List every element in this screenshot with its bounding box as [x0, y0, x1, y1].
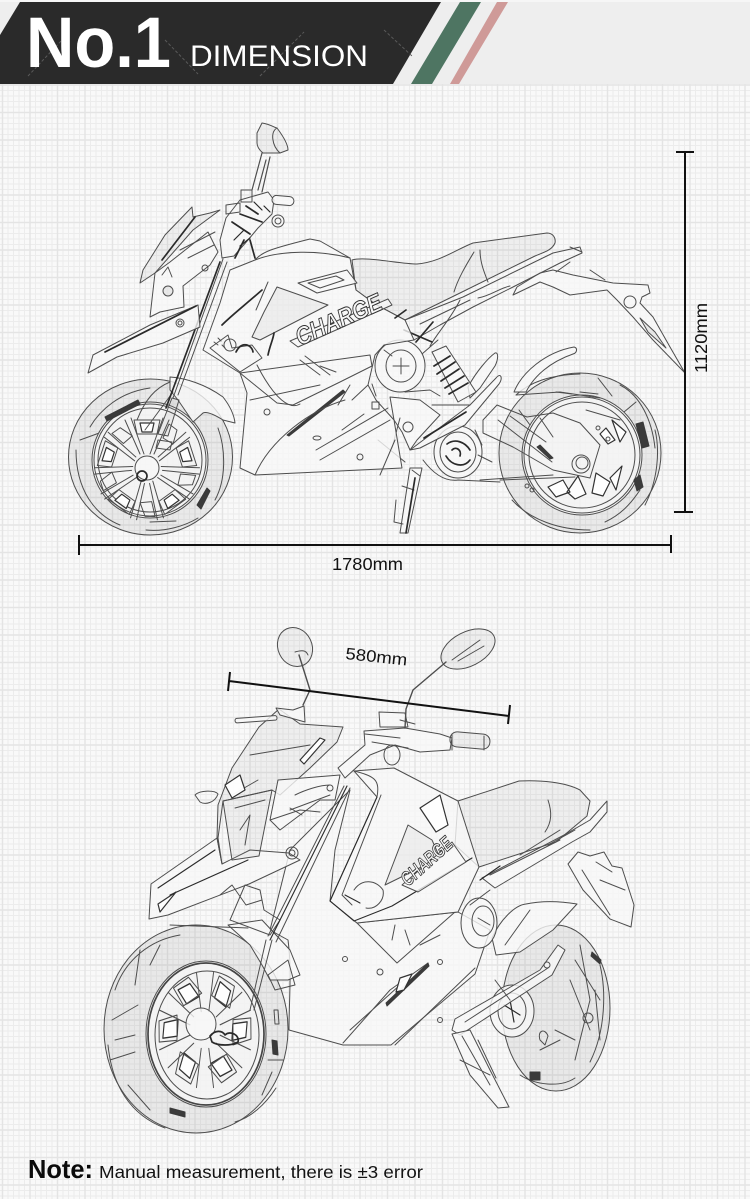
front wheel [104, 925, 288, 1133]
label: 1780mm: 1780mm [332, 554, 403, 574]
front wheel [68, 379, 232, 535]
mirror [252, 123, 288, 192]
CHARGE decal: CHARGE [397, 833, 458, 891]
pink stripe [450, 2, 508, 84]
tail and fender [480, 801, 634, 927]
front fender [137, 377, 235, 430]
front forks [156, 259, 227, 450]
heading label: DIMENSION [190, 40, 368, 73]
handlebar width dimension [228, 645, 510, 724]
length dimension [79, 535, 671, 574]
tank panel [330, 768, 479, 923]
right mirror [405, 621, 502, 728]
note label: Note: [28, 1154, 93, 1184]
front forks [250, 786, 350, 1010]
motor cover [461, 890, 497, 948]
header band [0, 0, 750, 84]
note [28, 1154, 423, 1184]
left mirror [271, 622, 319, 705]
rear hub and swing arm [452, 945, 565, 1037]
rear shock [422, 340, 476, 402]
tank panel [210, 270, 357, 372]
green stripe [411, 2, 481, 84]
heading number: No.1 [26, 4, 171, 83]
tank and body shell [203, 239, 414, 475]
front fender [170, 920, 300, 980]
side stand [394, 468, 422, 533]
black title banner [0, 2, 441, 84]
upper cowl and headlight [195, 709, 343, 864]
seat [352, 233, 555, 320]
label: 580mm: 580mm [345, 645, 408, 669]
rear wheel [499, 373, 661, 533]
upper cowl [140, 207, 220, 317]
handlebar and controls [235, 706, 491, 778]
hub motor [423, 426, 500, 482]
rear fender [492, 902, 577, 955]
swing arm [480, 405, 600, 480]
note text: Manual measurement, there is ±3 error [99, 1162, 423, 1182]
front fairing beak [88, 305, 200, 373]
height dimension [674, 152, 711, 512]
CHARGE decal: CHARGE [291, 288, 388, 351]
rear wheel [502, 925, 610, 1091]
motor cover [372, 340, 440, 396]
footrest hanger [378, 353, 501, 462]
side stand [452, 1030, 509, 1108]
seat [455, 781, 590, 867]
belly panel [270, 790, 490, 1045]
lower fairing beak [149, 838, 300, 935]
front three-quarter motorcycle line drawing [104, 621, 634, 1133]
tail subframe and fender [404, 247, 685, 373]
side-view motorcycle line drawing [68, 123, 685, 535]
label: 1120mm: 1120mm [691, 303, 711, 373]
rear fender [514, 347, 600, 398]
CHARGE decal [397, 833, 466, 892]
handlebar controls [220, 190, 294, 258]
